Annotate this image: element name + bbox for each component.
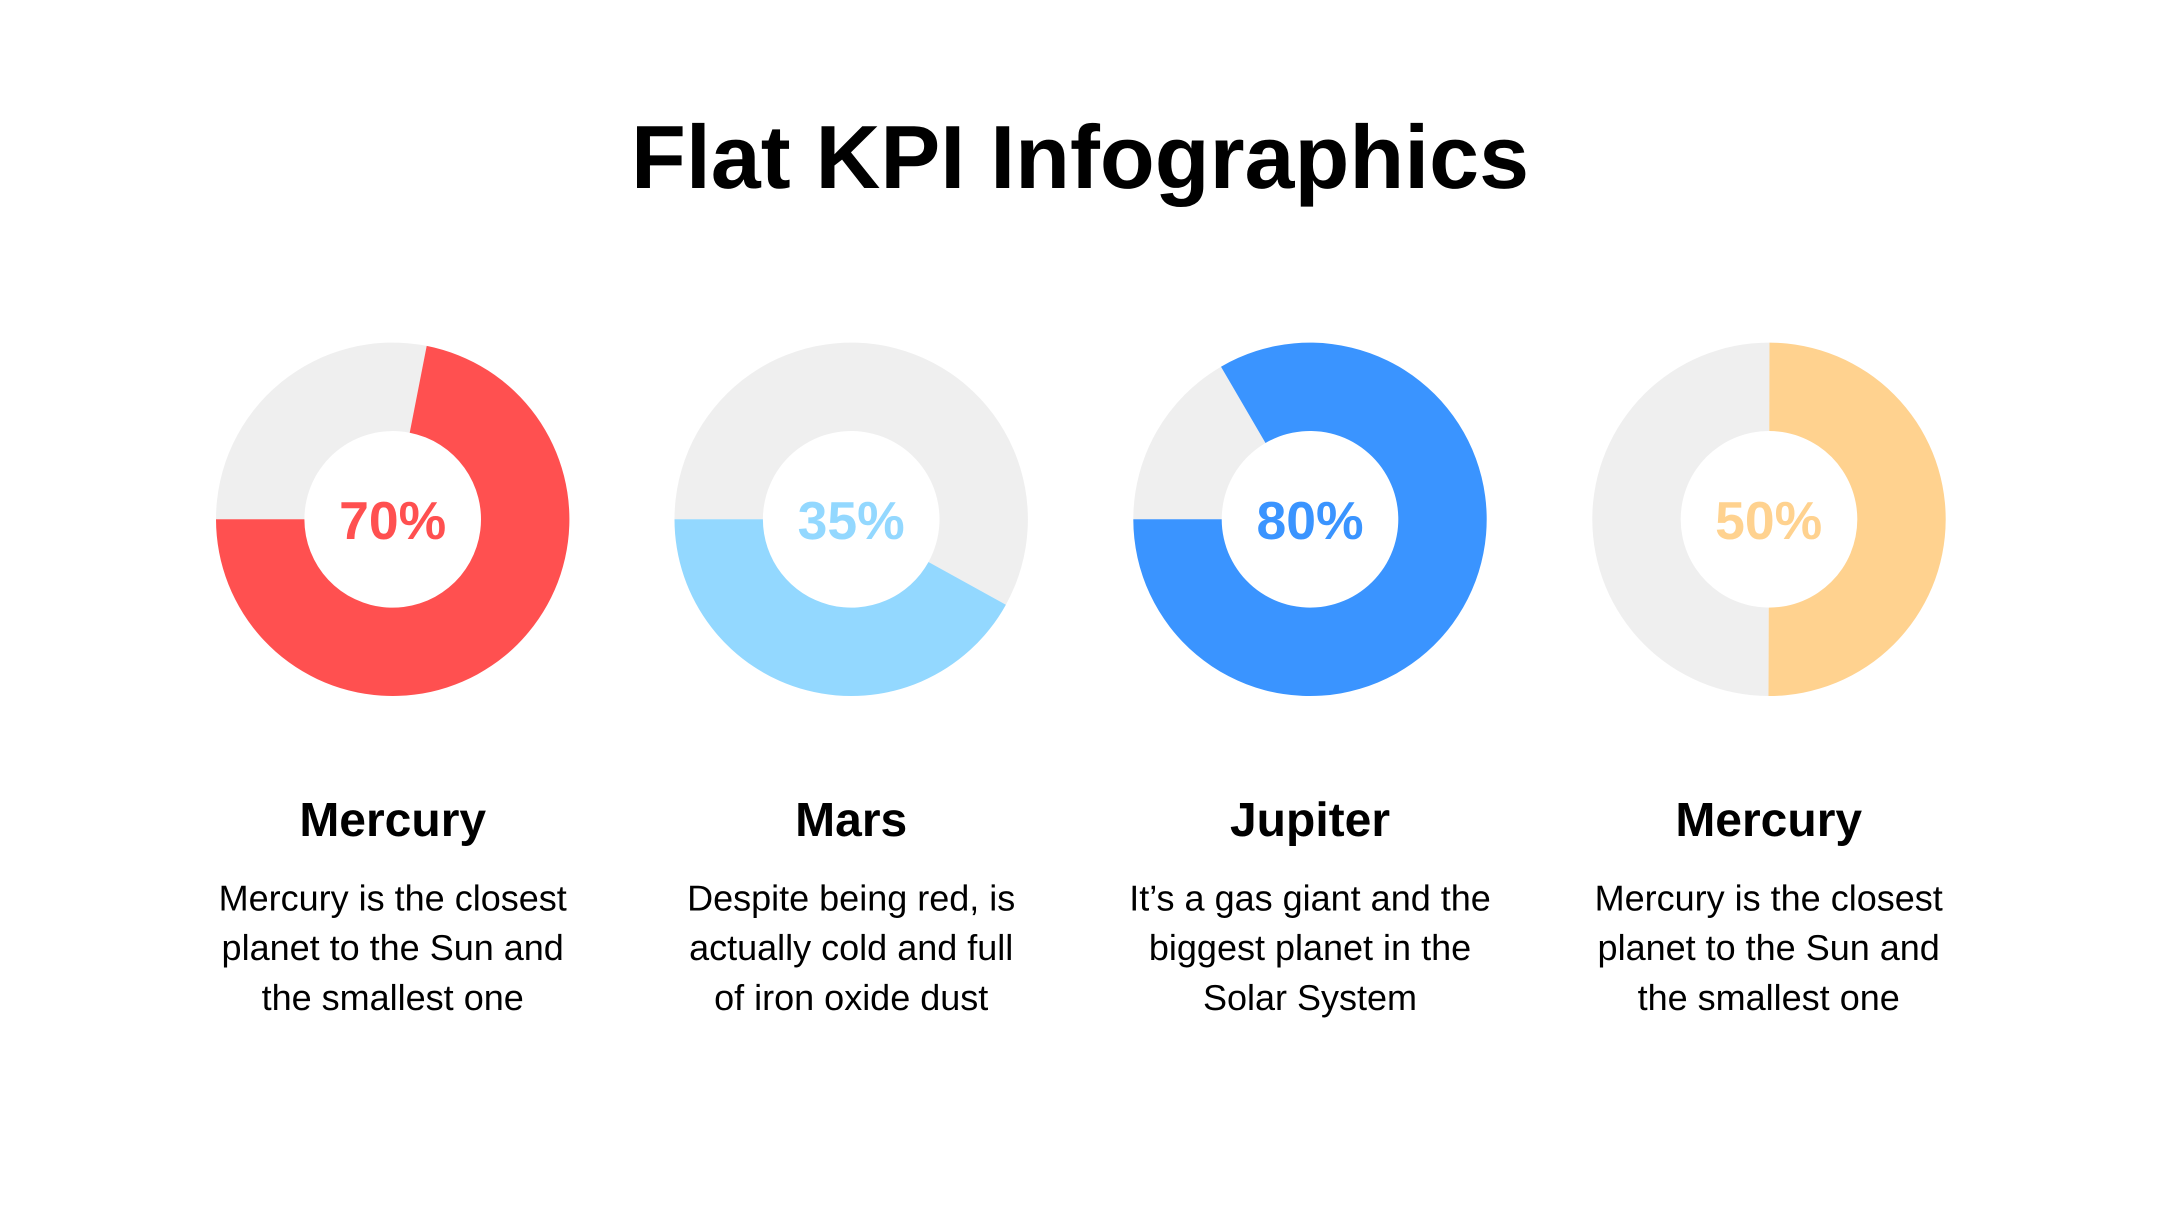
heading: Jupiter: Jupiter xyxy=(1230,794,1390,847)
value: 70%: 70% xyxy=(339,492,446,551)
heading: Mercury: Mercury xyxy=(1675,794,1862,847)
description: Mars: actually cold and full xyxy=(689,927,1013,968)
panel: Mars 35% xyxy=(674,343,1028,1018)
title: Flat KPI Infographics xyxy=(631,108,1529,208)
panel: Mercury 70% xyxy=(216,343,569,1018)
description: Jupiter: Solar System xyxy=(1203,977,1417,1018)
description: Mercury: Mercury is the closest xyxy=(219,878,567,919)
description: Mars: of iron oxide dust xyxy=(714,977,988,1018)
description: Mercury: the smallest one xyxy=(262,977,524,1018)
description: Mercury: planet to the Sun and xyxy=(1598,927,1940,968)
heading: Mars: Mars xyxy=(795,794,907,847)
donut chart: 70% xyxy=(216,343,569,696)
description: Mercury: planet to the Sun and xyxy=(222,927,564,968)
heading: Mercury: Mercury xyxy=(299,794,486,847)
description: Mercury: Mercury is the closest xyxy=(1595,878,1943,919)
donut chart: 50% xyxy=(1592,343,1946,696)
description: Jupiter: It’s a gas giant and the xyxy=(1129,878,1491,919)
donut chart: 80% xyxy=(1133,343,1487,696)
description: Jupiter: biggest planet in the xyxy=(1149,927,1471,968)
description: Mercury: the smallest one xyxy=(1638,977,1900,1018)
description: Mars: Despite being red, is xyxy=(687,878,1015,919)
panel: Mercury 50% xyxy=(1592,343,1946,1018)
donut chart: 35% xyxy=(674,343,1028,696)
value: 80%: 80% xyxy=(1256,492,1364,551)
value: 35%: 35% xyxy=(798,492,905,551)
panel: Jupiter 80% xyxy=(1129,343,1491,1018)
value: 50%: 50% xyxy=(1715,492,1822,551)
